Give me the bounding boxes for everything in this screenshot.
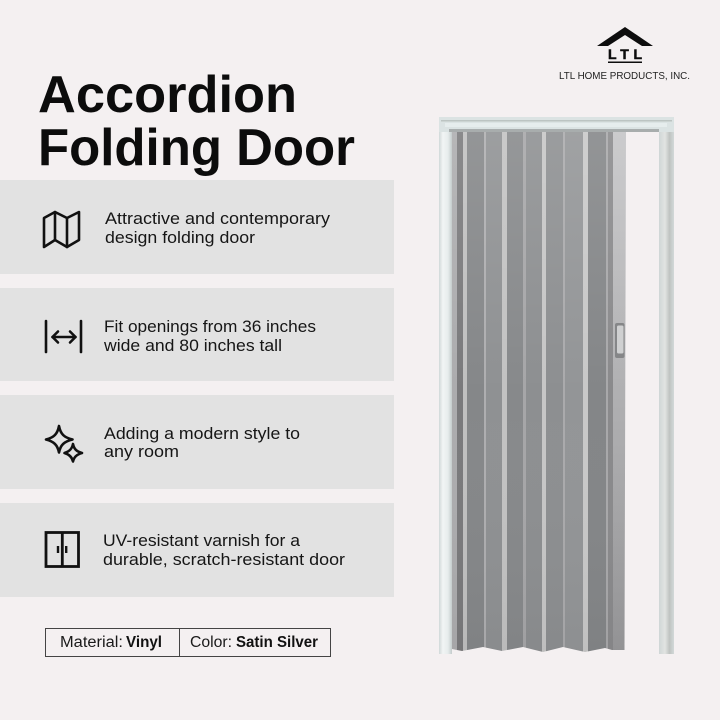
door handle <box>615 323 624 358</box>
specification table <box>46 628 330 656</box>
icon: sparkles <box>46 426 82 462</box>
color spec: Satin Silver <box>236 634 318 651</box>
feature text: durable, scratch-resistant door <box>103 551 346 569</box>
company name: LTL HOME PRODUCTS, INC. <box>559 70 690 82</box>
material spec: Vinyl <box>126 634 162 651</box>
folding door panels <box>452 132 626 654</box>
feature text: wide and 80 inches tall <box>103 337 282 355</box>
material spec: Material: <box>60 634 123 651</box>
color spec <box>190 634 318 651</box>
color spec: Color: <box>190 634 232 651</box>
panel: modern style feature <box>0 395 394 489</box>
feature text <box>104 425 300 461</box>
feature text: Adding a modern style to <box>104 425 300 443</box>
panel: fit openings feature <box>0 288 394 381</box>
feature text: design folding door <box>105 229 256 247</box>
door frame <box>439 117 674 654</box>
brand logo <box>559 27 690 82</box>
icon: double door <box>46 532 78 566</box>
panel: attractive design feature <box>0 180 394 274</box>
feature text: any room <box>104 443 179 461</box>
logo underline <box>608 62 642 63</box>
logo letters: LTL <box>608 46 642 62</box>
title: Accordion <box>38 66 297 124</box>
feature text: UV-resistant varnish for a <box>103 532 301 550</box>
logo roof icon <box>597 27 653 46</box>
icon: folded map <box>44 212 79 247</box>
feature text <box>105 210 331 247</box>
feature text: Fit openings from 36 inches <box>104 318 316 336</box>
material spec <box>60 634 162 651</box>
panel: UV-resistant feature <box>0 503 394 597</box>
feature text <box>103 318 316 355</box>
title <box>38 66 355 177</box>
title: Folding Door <box>38 119 355 177</box>
feature text <box>103 532 346 569</box>
feature text: Attractive and contemporary <box>105 210 331 228</box>
icon: width arrows <box>46 321 81 352</box>
product photo: accordion door <box>439 117 674 654</box>
